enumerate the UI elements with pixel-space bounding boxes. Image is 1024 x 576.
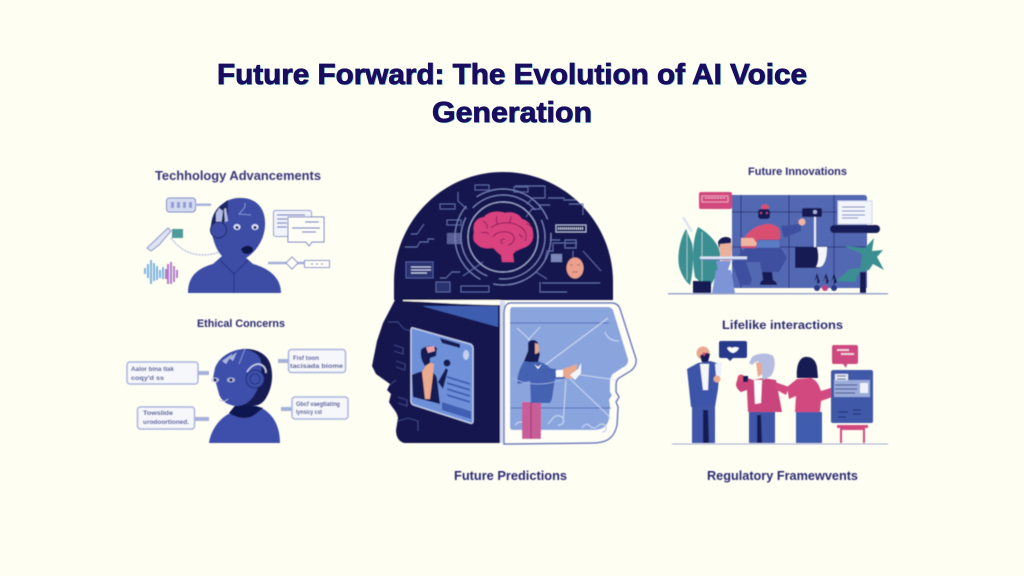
panel: future innovations [668, 166, 888, 294]
callout: right bottom [281, 397, 348, 419]
potted plant right [836, 238, 884, 293]
panel: future predictions head illustration [372, 172, 636, 444]
robot head and shoulders [188, 198, 281, 293]
icon: sound wave [145, 260, 177, 284]
note card [838, 201, 872, 224]
info kiosk [831, 370, 873, 443]
left face silhouette [372, 300, 500, 443]
heading: future innovations: Future Innovations [748, 166, 847, 178]
pink speech card [832, 345, 858, 368]
icon: chat cards [274, 210, 324, 246]
title [217, 59, 808, 130]
dome: dark head with circuits [394, 172, 613, 300]
icon: chip tag [166, 198, 211, 212]
heading: ethical concerns: Ethical Concerns [197, 318, 285, 330]
icon: small face [566, 258, 584, 278]
callout: left bottom [138, 407, 209, 429]
camera on stand [795, 208, 827, 268]
heading: future predictions: Future Predictions [454, 469, 567, 483]
icon: slider control [268, 257, 330, 269]
callout: right bottom: lynsicy cst [296, 409, 323, 416]
person: bearded man [687, 346, 722, 443]
icon: brain [473, 212, 533, 262]
title: Future Forward: The Evolution of AI Voice [217, 59, 807, 91]
title: Future Forward: The Evolution of AI Voice [218, 60, 808, 92]
heading: technology advancements: Techhology Advancements [155, 169, 321, 183]
table with head bust [700, 237, 747, 293]
speech bubble: heart [719, 341, 747, 361]
callout: left top: Aalor bina tiak [131, 366, 174, 373]
title: Generation [432, 97, 592, 129]
person: grey-haired woman [736, 353, 782, 443]
panel: lifelike interactions [672, 318, 888, 444]
right blue panel with person [510, 307, 628, 439]
panel: ethical concerns [127, 318, 348, 443]
title: Generation [433, 98, 593, 130]
callout: left top: coqy'd ss [131, 375, 164, 382]
person: woman with dark hair [775, 357, 841, 443]
icon: robot arm with chip [147, 228, 220, 255]
callout: right bottom: Gbcf vaegtiating [296, 401, 340, 408]
panel: technology advancements [145, 169, 330, 293]
callout: right top [278, 350, 346, 372]
callout: right top: tacisada biome [290, 363, 343, 370]
dark bar [830, 225, 880, 233]
heading: regulatory frameworks: Regulatory Framewvents [707, 469, 858, 483]
left screen with person [411, 328, 473, 423]
divider and white frame [500, 301, 636, 444]
pink sign [699, 192, 732, 209]
small seedlings [814, 273, 837, 291]
floor line [672, 444, 888, 445]
callout: right top: Fisf toon [293, 355, 319, 362]
grid wall [732, 195, 867, 288]
potted plant left [678, 217, 720, 293]
floor line [668, 293, 888, 294]
callout: left bottom: Towslide [143, 410, 173, 417]
robot head in profile [209, 349, 280, 443]
heading: lifelike interactions: Lifelike interactions [722, 318, 843, 332]
callout: left top [127, 362, 209, 384]
person with VR headset [732, 204, 806, 285]
callout: left bottom: urodoortioned. [143, 419, 189, 426]
